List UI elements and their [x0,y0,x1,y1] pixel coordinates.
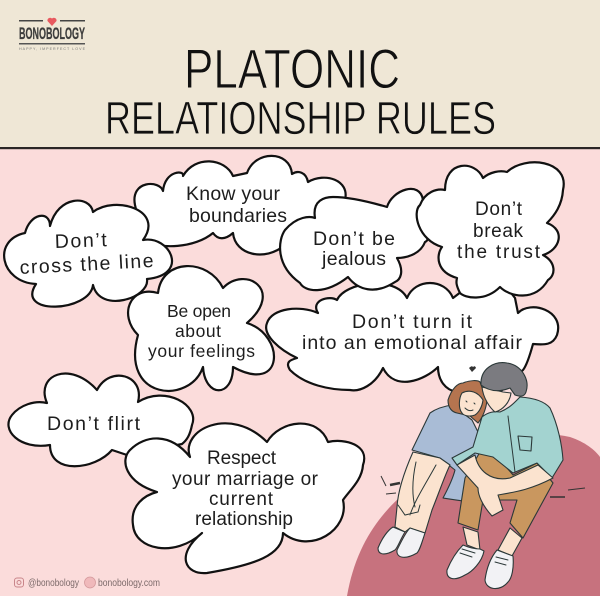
logo [19,18,86,51]
woman's shoes [378,527,425,557]
logo: HAPPY, IMPERFECT LOVE [19,47,86,51]
title [105,37,496,144]
cloud: don't break the trust [417,162,564,298]
cloud: don't turn it into an emotional affair: into an emotional affair [302,332,522,354]
mound [347,434,600,596]
man's arm and hand [457,455,553,516]
woman's body [412,405,487,501]
footer handles: bonobology.com [98,578,160,589]
cloud: don't break the trust: break [473,221,524,242]
cloud: be open about your feelings [128,266,274,391]
cloud: don't break the trust: Don’t [475,199,523,220]
title: RELATIONSHIP RULES [105,92,496,144]
illustration: couple [378,363,585,589]
cloud: don't flirt: Don’t flirt [47,413,141,435]
cloud: don't break the trust: the trust [457,242,541,263]
header band [0,0,600,149]
title: PLATONIC [184,37,400,100]
woman's head [448,381,487,423]
woman's leg division and hands [398,462,436,515]
man's head [481,363,527,412]
man's shirt [452,397,563,478]
cloud: know your boundaries: boundaries [189,205,287,227]
man's placket and buttons [508,416,515,472]
cloud: don't be jealous: jealous [321,248,386,270]
cloud: don't be jealous: Don’t be [313,228,395,250]
man's pocket [518,436,532,451]
man's shoes [447,545,513,589]
footer handles: @bonobology [28,578,79,589]
woman's legs [395,452,450,533]
footer handles [14,577,160,589]
cloud: know your boundaries: Know your [186,183,280,205]
cloud: don't turn it into an emotional affair: Don’t turn it [352,311,473,333]
small heart marks [469,366,476,372]
logo: BONOBOLOGY [19,25,85,43]
man's ankles [463,527,522,556]
motion marks [381,476,585,497]
cloud: don't be jealous [280,189,430,290]
cloud: don't cross the line: Don’t [54,229,108,253]
cloud: don't flirt [8,374,193,466]
cloud: don't turn it into an emotional affair [266,283,558,392]
cloud: respect your marriage or current relationship: your marriage or [172,469,319,490]
cloud: be open about your feelings: your feelings [148,341,255,361]
cloud: be open about your feelings: Be open [167,301,231,321]
cloud: don't cross the line: cross the line [19,250,154,279]
cloud: respect your marriage or current relationship: current [209,489,274,510]
cloud: respect your marriage or current relationship: relationship [195,509,293,530]
cloud: be open about your feelings: about [175,321,221,341]
cloud: know your boundaries [134,156,346,254]
cloud: respect your marriage or current relationship [125,423,364,573]
man's trousers [458,452,553,538]
cloud: respect your marriage or current relationship: Respect [207,448,277,469]
cloud: don't cross the line [4,201,172,307]
